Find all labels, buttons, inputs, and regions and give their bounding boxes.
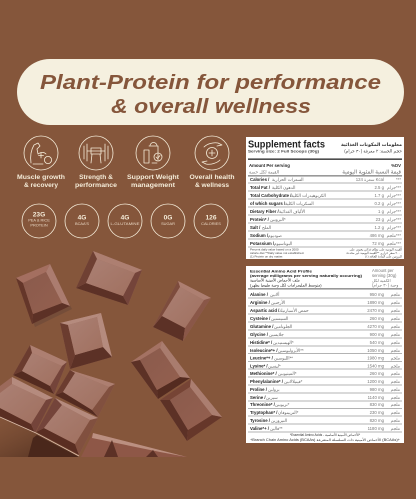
amino rows: Serine / [250, 395, 266, 400]
amino rows: فينيلالانين* [284, 379, 303, 384]
amount arabic: القيمة لكل حصة [249, 170, 279, 174]
nutrition rows: 2.5 g [374, 185, 385, 190]
piece 4 [60, 313, 112, 369]
amino rows: 1890 mg [367, 300, 385, 305]
amino rows: 1140 mg [368, 395, 385, 400]
daily value: %DV [391, 163, 401, 168]
nutrition rows: الألياف الغذائية [279, 208, 305, 214]
footnotes: Percent daily value based on a 2000 [250, 248, 299, 252]
nutrition rows: Total Carbohydrate / [250, 193, 292, 198]
nutrition rows: سعرة 124 Kcal [356, 177, 384, 182]
title: & overall wellness [111, 95, 311, 118]
footnotes: (1) Protein on dry matter. [250, 254, 283, 258]
amino rows [248, 291, 402, 432]
amino rows: 2470 mg [367, 308, 385, 313]
amino rows: Glycine / [250, 332, 269, 337]
label: wellness: & wellness [195, 182, 229, 189]
amino footnotes: *Essential Amino Acids - الأحماض الأمينية الأساسية* [290, 432, 361, 437]
panel: amino acid profile [246, 266, 404, 443]
amino rows: 900 mg [370, 332, 385, 337]
amino rows: ألانين [270, 291, 279, 297]
amino rows: ملجم [391, 300, 400, 306]
amino rows: 830 mg [370, 402, 385, 407]
amino rows: ملجم [391, 371, 400, 377]
amino rows: 260 mg [370, 371, 385, 376]
icon: weight management [136, 136, 170, 170]
bar piece a [13, 345, 67, 394]
nutrition rows: 486 mg [370, 233, 385, 238]
nutrition rows: الدهون الكلية [272, 185, 296, 190]
nutrition rows: Potassium / [250, 241, 275, 246]
nutrition rows: *** [396, 217, 401, 222]
amino rows: الهيستيدين* [273, 340, 294, 345]
nutrition rows: الكربوهيدرات الكلية [291, 193, 326, 198]
amount per serving: Amount Per serving [249, 163, 290, 168]
label: management: management [131, 182, 176, 189]
stat: glutamine: 4G [121, 214, 129, 222]
nutrition rows: *** [396, 225, 401, 230]
nutrition rows: 0.2 g [374, 201, 385, 206]
amino rows: Glutamine / [250, 324, 274, 329]
nutrition rows: السعرات الحرارية [272, 177, 304, 182]
bar pale edge [0, 417, 79, 456]
panel: supplement facts [246, 137, 404, 259]
amino rows: الليوسين** [274, 356, 293, 360]
footnotes: calorie diet **Daily value not established. [250, 251, 304, 255]
stats row [22, 204, 228, 238]
amount column heading [372, 268, 398, 288]
amino rows: ملجم [391, 348, 400, 354]
amino rows: 1180 mg [368, 426, 385, 431]
heading: arabic: معلومات المكونات الغذائية [341, 142, 402, 148]
label: support weight: Support Weight [127, 174, 180, 181]
nutrition rows: Total Fat / [250, 185, 271, 190]
amino rows: ملجم [391, 402, 400, 408]
amino rows: Phenylalanine* / [250, 379, 284, 384]
nutrition rows: البوتاسيوم [274, 241, 292, 246]
amino rows: 1050 mg [367, 348, 385, 353]
amino rows: 1980 mg [367, 356, 385, 360]
title: Plant-Protein for performance [40, 71, 381, 94]
label: strength: Strength & [79, 174, 113, 181]
nutrition rows: الملح [262, 225, 271, 230]
amino rows: سيرين [266, 395, 278, 400]
amino heading: (average milligrams per serving naturally occurring) [250, 273, 363, 278]
nutrition rows: صوديوم [268, 233, 282, 238]
nutrition rows: of which sugars / [250, 201, 286, 206]
amino rows: ملجم [391, 426, 400, 432]
amino rows: الأرجنين [271, 299, 285, 305]
icon: strength [79, 136, 113, 170]
stat: protein: PEA & RICE [28, 218, 50, 222]
stat: BCAAs: 4G [78, 214, 86, 222]
amino footnotes [250, 432, 400, 442]
nutrition rows: *** [396, 241, 401, 246]
amino rows: ليسين* [268, 364, 281, 368]
amino rows: 230 mg [370, 410, 385, 415]
nutrition rows: Salt / [250, 225, 261, 230]
amount column heading: serving (30g) [372, 273, 397, 278]
amount column heading: وجبة (٣٠ جرام) [372, 282, 398, 288]
amino rows: Isoleucine*+ / [250, 348, 278, 353]
amino rows: الجلوتامين [274, 324, 292, 329]
nutrition rows: 72 mg [372, 241, 385, 246]
amino rows: ملجم [391, 316, 400, 322]
stat: protein: 23G [33, 212, 45, 218]
piece 1 [16, 264, 72, 327]
nutrition rows: ملجم [387, 233, 396, 239]
stat: calories: 126 [205, 214, 217, 222]
bar piece c [0, 377, 53, 433]
amino rows: 1200 mg [367, 379, 385, 384]
nutrition rows: *** [396, 233, 401, 238]
amino rows: ثريونين* [275, 402, 290, 407]
nutrition rows: البروتين* [270, 217, 286, 222]
amino rows: Lysine* / [250, 364, 268, 368]
amino rows: الميثيونين* [278, 371, 297, 376]
amino rows: فالين** [270, 426, 283, 431]
chocolate pieces image [0, 251, 222, 457]
amino footnotes: +Branch Chain Amino Acids (BCAAs) الأحماض الأمينية ذات السلسلة المتفرعة (BCAAs)+ [250, 437, 400, 442]
amino rows: ملجم [391, 324, 400, 330]
amino rows: ملجم [391, 356, 400, 362]
nutrition rows: 1.7 g [374, 193, 385, 198]
amino rows: Aspartic acid / [250, 308, 280, 313]
daily value arabic: قيمة النسبة المئوية اليومية [342, 170, 401, 176]
stat: sugar: SUGAR [161, 221, 175, 226]
nutrition rows: 1.2 g [374, 225, 385, 230]
amino rows: التريبتوفان* [278, 410, 299, 415]
piece 5a [131, 341, 190, 399]
amino rows: 540 mg [370, 340, 385, 345]
icon: health [195, 136, 229, 170]
bottom dark piece [28, 435, 78, 457]
stat: calories [194, 204, 228, 238]
stat: glutamine: L-GLUTAMINE [110, 221, 140, 226]
amino rows: 980 mg [370, 387, 385, 392]
amino rows: 820 mg [370, 418, 385, 423]
amino rows: ملجم [391, 340, 400, 346]
footnotes: القيمة اليومية على نظام غذائي يحتوي على [350, 248, 402, 252]
amount column heading: Amount per [372, 268, 394, 273]
stat: BCAAs [65, 204, 99, 238]
amino heading: ملف الأحماض الأمينية الأساسية [250, 278, 300, 282]
serving size: Serving size: 2 Full Scoops (30g) [248, 148, 320, 154]
amino rows: Proline / [250, 387, 268, 392]
icon: muscle growth [24, 136, 58, 170]
amino heading: (متوسط المليجرامات لكل وجبة طبيعيا يظهر) [250, 282, 322, 288]
amino rows: ملجم [391, 308, 400, 314]
amino rows: Methionine* / [250, 371, 278, 376]
stat: sugar: 0G [164, 214, 172, 222]
nutrition rows: *** [396, 201, 401, 206]
stat: calories: CALORIES [201, 221, 221, 226]
nutrition rows: 1 g [378, 209, 385, 214]
amino rows: برولين [268, 387, 280, 392]
amino rows: الأيزوليوسين** [278, 347, 304, 353]
nutrition rows: جرام [387, 217, 396, 222]
nutrition rows: Calories / [250, 177, 270, 182]
amino rows: جلايسين [269, 332, 284, 337]
nutrition rows: جرام [387, 225, 396, 230]
bottom lying bar [81, 433, 187, 457]
amino heading [250, 268, 363, 288]
amino heading: Essential Amino Acid Profile [250, 268, 313, 274]
stat: protein [22, 204, 56, 238]
amino rows: ملجم [391, 332, 400, 338]
amino rows: Alanine / [250, 292, 269, 297]
stat: protein: PROTEIN [30, 222, 48, 228]
amino rows: Arginine / [250, 300, 271, 305]
amino rows: التيروزين [271, 418, 287, 423]
nutrition rows: *** [396, 177, 401, 182]
nutrition rows: *** [396, 185, 401, 190]
amino rows: Tyrosine / [250, 418, 271, 423]
amino rows: Cysteine / [250, 316, 271, 321]
nutrition rows: Dietary Fiber / [250, 209, 279, 214]
nutrition rows: جرام [387, 201, 396, 206]
amino rows: Threonine* / [250, 402, 276, 407]
amino rows: ملجم [391, 410, 400, 416]
nutrition rows [248, 177, 402, 247]
piece 2 [76, 251, 142, 305]
amino rows: Tryptophan* / [250, 410, 278, 415]
nutrition rows: Sodium / [250, 233, 269, 238]
bar piece b [55, 370, 115, 417]
nutrition rows: *** [396, 209, 401, 214]
nutrition rows: السكريات الكلية [285, 201, 314, 206]
amino rows: ملجم [391, 364, 400, 370]
nutrition rows: Protein* / [250, 217, 270, 222]
amino rows: Leucine*+ / [250, 356, 274, 360]
amino rows: Histidine* / [250, 340, 273, 345]
nutrition rows: جرام [387, 209, 396, 214]
serving arabic: حجم الحصة: ٢ مغرفة (٣٠ جرام) [344, 148, 402, 154]
benefits row [17, 136, 234, 189]
amino rows: ملجم [391, 292, 400, 298]
amount column heading: الكمية لكل [372, 278, 391, 283]
amino rows: السيستين [271, 316, 288, 321]
amino rows: Valine*+ / [250, 426, 270, 431]
footnotes: ٢٠٠٠ سعر حراري **القيمة اليومية غير محددة [346, 251, 402, 255]
amino rows: ملجم [391, 418, 400, 424]
amino rows: ملجم [391, 387, 400, 393]
title [40, 71, 381, 118]
label: performance: performance [75, 182, 117, 189]
nutrition rows: 23 g [376, 217, 385, 222]
nutrition rows: جرام [387, 185, 396, 190]
amino rows: حمض الأسبارتيك [279, 307, 309, 313]
amino rows: ملجم [391, 395, 400, 401]
footnotes: (١) البروتين على المادة الجافة [365, 254, 402, 258]
piece 3 [153, 281, 211, 341]
amino rows: 260 mg [370, 316, 385, 321]
heading: supplement facts: Supplement facts [248, 140, 325, 150]
nutrition rows: ملجم [387, 241, 396, 247]
footnotes [250, 248, 402, 258]
bar piece d [36, 398, 98, 455]
amino rows: 950 mg [370, 292, 385, 297]
amino rows: 1540 mg [367, 364, 385, 368]
stat: sugar [151, 204, 185, 238]
amino rows: ملجم [391, 379, 400, 385]
nutrition rows: جرام [387, 193, 396, 198]
label: recovery: & recovery [24, 182, 58, 189]
title pill [17, 59, 404, 125]
nutrition rows: *** [396, 193, 401, 198]
stat: BCAAs: BCAA'S [75, 221, 89, 226]
stat: glutamine [108, 204, 142, 238]
label: overall health: Overall health [190, 174, 234, 181]
amino rows: 4270 mg [367, 324, 385, 329]
piece 5b [160, 379, 222, 441]
shadow under bar [0, 417, 79, 457]
label: muscle growth: Muscle growth [17, 174, 65, 181]
